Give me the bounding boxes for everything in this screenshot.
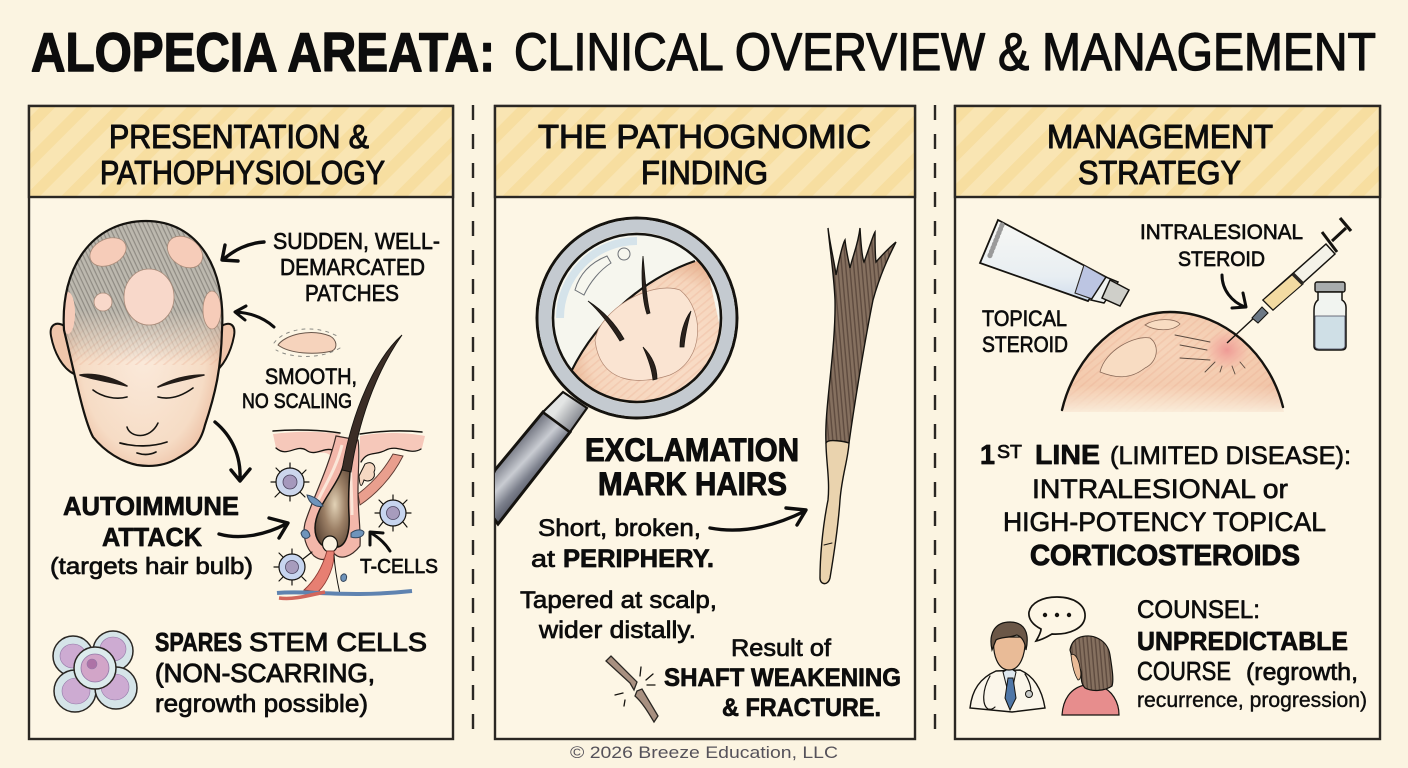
t-cell 1 (271, 463, 309, 501)
icon: magnifying glass over scalp (480, 218, 740, 524)
label: smooth no scaling: NO SCALING (242, 390, 352, 413)
label: autoimmune attack (50, 491, 253, 579)
arrow: head to autoimmune (215, 422, 250, 481)
label: short broken at periphery: at (531, 546, 555, 573)
title (31, 21, 1376, 83)
label: t-cells: T-CELLS (360, 556, 438, 578)
label: shaft weakening and fracture (664, 635, 901, 722)
icon: stem cell cluster (53, 631, 137, 712)
text: counsel unpredictable course: recurrence, progression) (1137, 689, 1367, 712)
label: intralesional steroid: STEROID (1178, 248, 1265, 271)
text: counsel unpredictable course: COUNSEL: (1137, 596, 1260, 624)
text: first line therapy: (LIMITED DISEASE): (1110, 442, 1351, 470)
label: topical steroid (982, 306, 1068, 357)
header: presentation and pathophysiology: PRESENTATION & (109, 118, 369, 155)
label: autoimmune attack: AUTOIMMUNE (63, 491, 239, 521)
header: management strategy (955, 106, 1380, 197)
label: topical steroid: STEROID (982, 332, 1068, 357)
text: first line therapy: LINE (1035, 439, 1100, 470)
label: exclamation mark hairs: MARK HAIRS (598, 466, 787, 502)
label: shaft weakening and fracture: Result of (731, 635, 831, 662)
label: smooth no scaling (242, 364, 357, 413)
text: first line therapy: INTRALESIONAL or (1032, 474, 1288, 504)
label: exclamation mark hairs: EXCLAMATION (585, 432, 799, 468)
label: intralesional steroid (1140, 221, 1303, 271)
icon: scalp with patches (1062, 312, 1284, 412)
arrow: attack to follicle (219, 518, 288, 538)
label: tapered at scalp: Tapered at scalp, (520, 587, 717, 614)
label: patches (273, 228, 440, 306)
icon: smooth skin patch (274, 329, 340, 356)
panel: management strategy (955, 106, 1380, 739)
t-cell 3 (274, 549, 312, 585)
header: presentation and pathophysiology (29, 106, 453, 197)
text: counsel unpredictable course: (regrowth, (1246, 659, 1358, 686)
label: spares stem cells: STEM CELLS (249, 627, 427, 657)
label: intralesional steroid: INTRALESIONAL (1140, 221, 1303, 244)
arrow: to head patches (222, 242, 264, 261)
label: patches: DEMARCATED (280, 254, 425, 280)
icon: syringe (1227, 218, 1351, 343)
footer copyright: © 2026 Breeze Education, LLC (570, 743, 838, 762)
label: short broken at periphery: Short, broken, (538, 515, 701, 542)
text: counsel unpredictable course: COURSE (1137, 656, 1231, 686)
arrow: to injection site (1222, 275, 1246, 308)
label: patches: PATCHES (305, 280, 399, 306)
text: counsel unpredictable course: UNPREDICTABLE (1137, 626, 1348, 656)
label: shaft weakening and fracture: & FRACTURE. (722, 694, 881, 722)
header: management strategy: MANAGEMENT (1047, 118, 1273, 155)
arrow: to exclamation hair (710, 508, 806, 530)
icon: doctor (970, 622, 1045, 712)
label: autoimmune attack: ATTACK (102, 522, 202, 552)
text: counsel unpredictable course (1137, 596, 1367, 712)
text: first line therapy: ST (997, 442, 1022, 462)
label: spares stem cells: SPARES (155, 627, 242, 657)
label: topical steroid: TOPICAL (982, 306, 1067, 331)
text: first line therapy (980, 439, 1351, 572)
header: management strategy: STRATEGY (1078, 154, 1241, 191)
label: autoimmune attack: (targets hair bulb) (50, 553, 253, 579)
icon: patient (1062, 636, 1119, 715)
icon: medication vial (1314, 282, 1346, 350)
label: tapered at scalp: wider distally. (538, 617, 696, 644)
label: smooth no scaling: SMOOTH, (265, 364, 357, 389)
header: the pathognomonic finding: THE PATHOGNOMIC (538, 118, 871, 155)
label: short broken at periphery (531, 515, 714, 573)
panel: the pathognomonic finding (480, 106, 915, 739)
label: exclamation mark hairs (585, 432, 799, 502)
label: spares stem cells: regrowth possible) (155, 690, 368, 718)
text: first line therapy: HIGH-POTENCY TOPICAL (1003, 507, 1326, 537)
label: short broken at periphery: PERIPHERY. (563, 545, 714, 573)
icon: head with bald patches (51, 215, 234, 466)
icon: speech bubble (1029, 597, 1085, 641)
label: patches: SUDDEN, WELL- (273, 228, 440, 254)
panel: presentation and pathophysiology (29, 106, 453, 739)
arrow: t-cells label (370, 532, 390, 551)
text: first line therapy: 1 (980, 439, 995, 470)
dashed dividers (473, 105, 935, 738)
icon: topical steroid tube (980, 220, 1129, 306)
header: the pathognomonic finding (495, 106, 915, 197)
title: ALOPECIA AREATA: (31, 21, 495, 83)
arrow: smooth patch to head (235, 306, 274, 327)
t-cell 2 (375, 495, 411, 531)
label: spares stem cells: (NON-SCARRING, (155, 658, 375, 688)
diagram: hair follicle with t-cells (271, 335, 425, 598)
icon: exclamation mark hair (820, 228, 896, 584)
label: tapered at scalp (520, 587, 717, 644)
label: shaft weakening and fracture: SHAFT WEAKENING (664, 664, 901, 692)
header: presentation and pathophysiology: PATHOPHYSIOLOGY (100, 154, 385, 191)
text: first line therapy: CORTICOSTEROIDS (1030, 540, 1300, 572)
header: the pathognomonic finding: FINDING (641, 154, 768, 191)
label: spares stem cells (155, 627, 427, 718)
icon: fractured hair shaft (606, 656, 658, 722)
